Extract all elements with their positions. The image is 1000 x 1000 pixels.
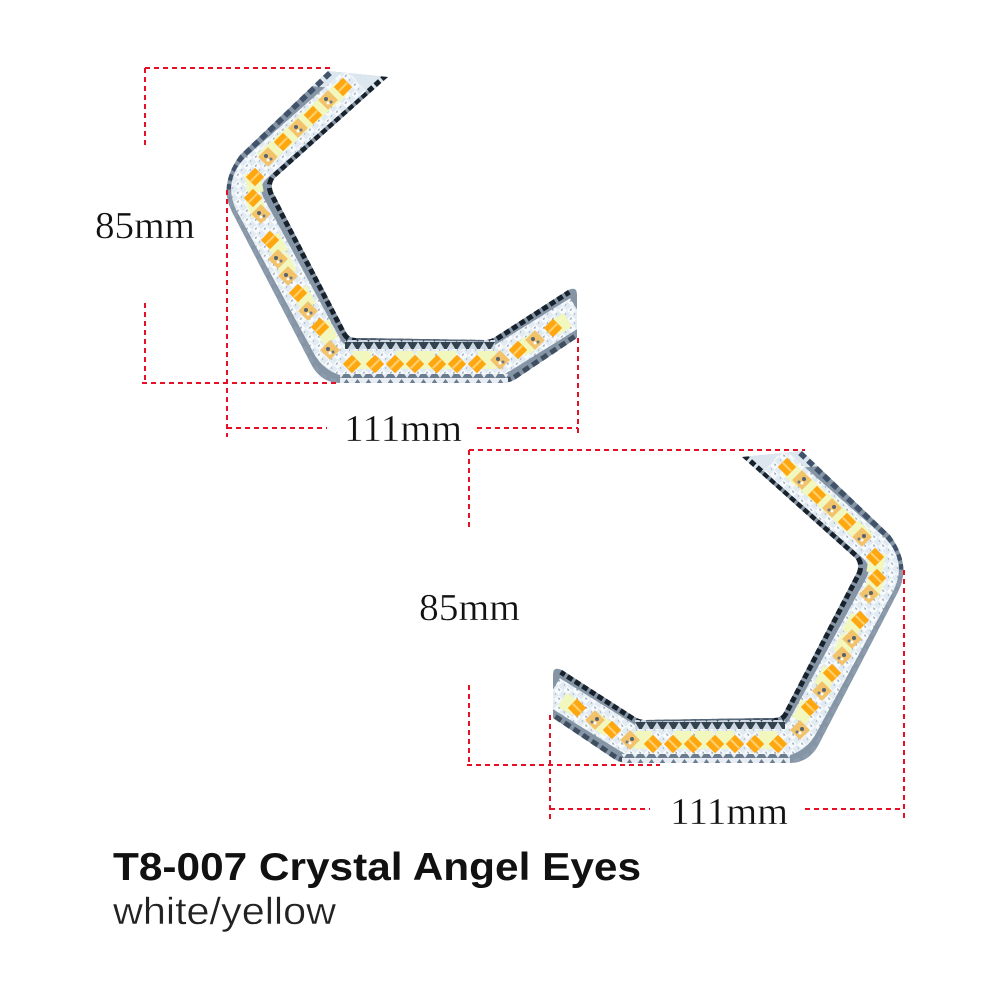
dimension: upper width 111mm (227, 190, 578, 450)
dimension: upper height 85mm (95, 68, 337, 383)
dimension: lower width 111mm: 111mm (670, 791, 788, 833)
dimension: lower width 111mm (550, 570, 904, 833)
subtitle: white/yellow (112, 891, 337, 933)
product: lower crystal angel eye (552, 448, 904, 763)
dimension: upper height 85mm: 85mm (95, 205, 195, 247)
dimension: lower height 85mm: 85mm (419, 587, 520, 629)
title: T8-007 Crystal Angel Eyes (113, 846, 641, 889)
dimension: upper width 111mm: 111mm (344, 408, 462, 450)
product: upper crystal angel eye (226, 68, 578, 383)
dimension: lower height 85mm (419, 450, 805, 765)
